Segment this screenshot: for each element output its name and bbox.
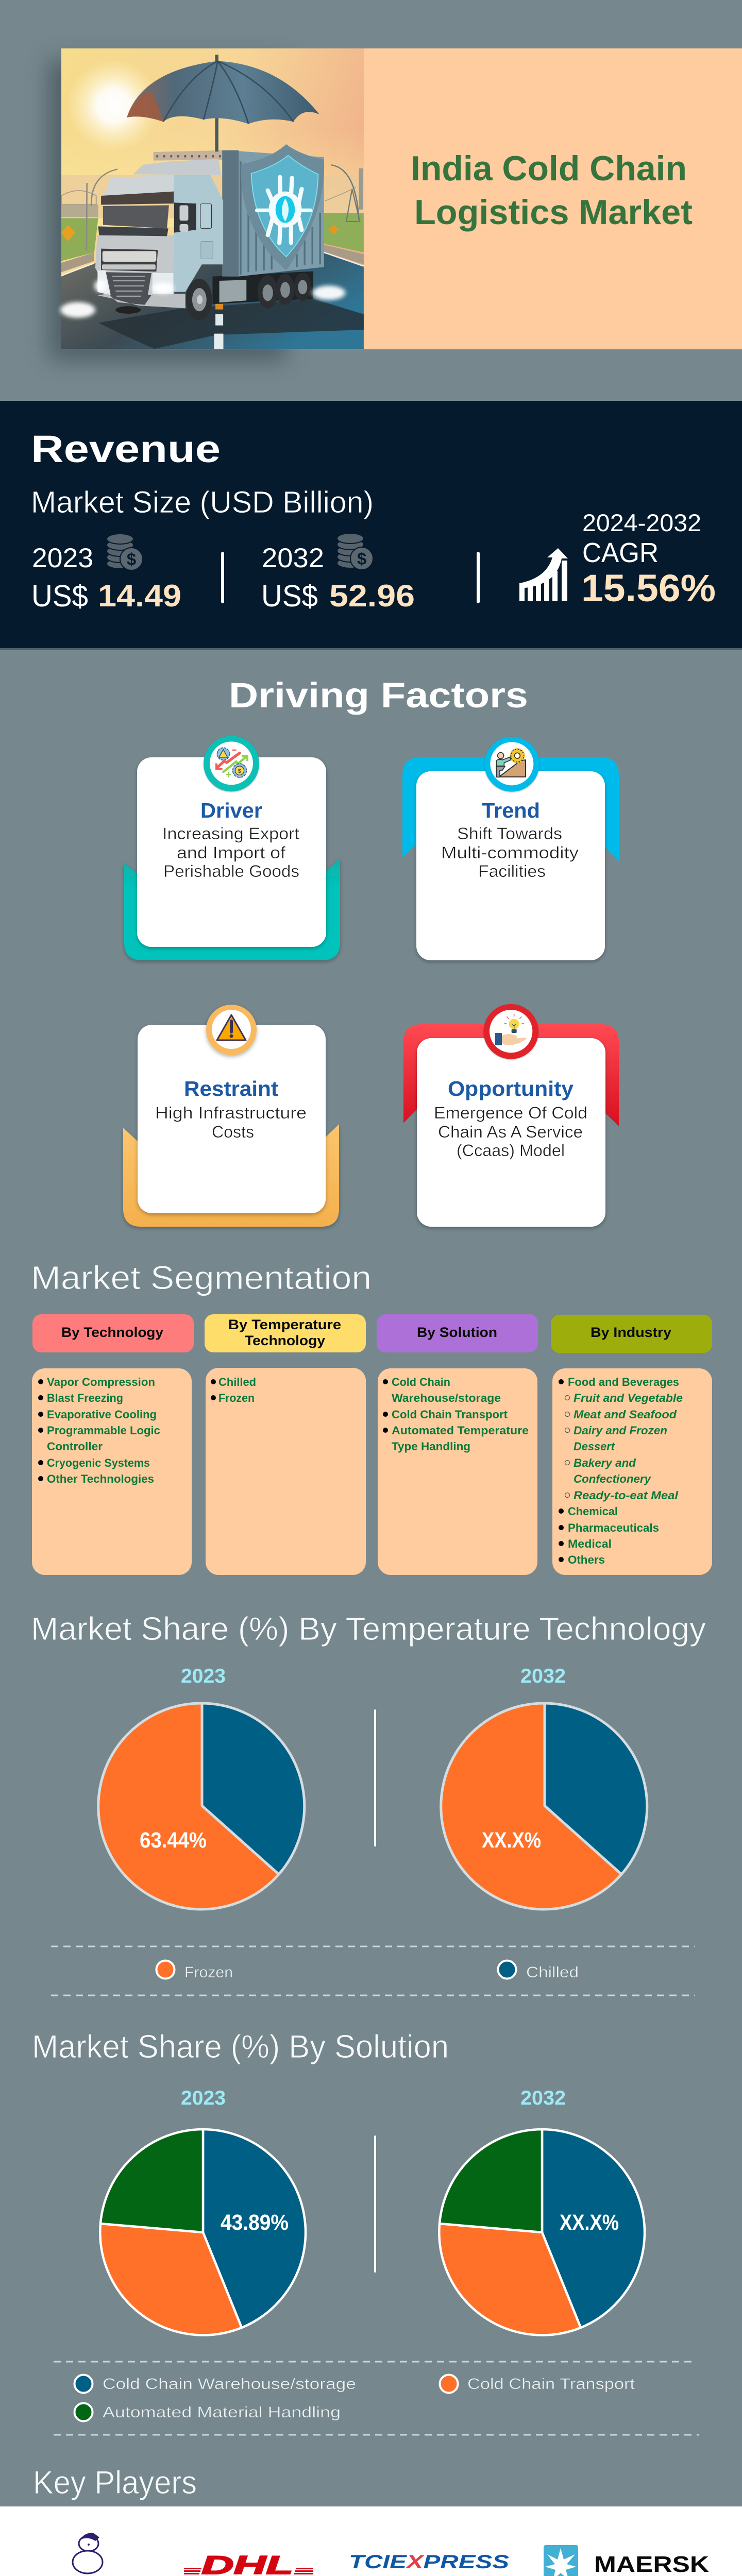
- pie chart: temperature technology 2023: [98, 1703, 305, 1909]
- panel: by industry: Confectionery: [574, 1472, 652, 1485]
- divider: [477, 552, 480, 603]
- text: driver description: and Import of: [177, 843, 285, 862]
- heading: Trend: [482, 799, 540, 822]
- logo: TCI Express: TCIE XPRESS: [349, 2551, 509, 2572]
- icon: coins 2032: $: [357, 549, 366, 568]
- panel: by temperature technology: Chilled: [218, 1376, 256, 1388]
- panel: trend: [402, 737, 619, 960]
- label: 2032: 2032: [520, 1665, 566, 1687]
- logo: DHL: [184, 2551, 313, 2576]
- panel: by solution: Warehouse/storage: [392, 1392, 501, 1404]
- icon: hand with lightbulb: [483, 1004, 538, 1059]
- logo: snowman: [34, 2533, 151, 2576]
- text: opportunity description: Emergence Of Cold: [434, 1104, 587, 1122]
- panel: by industry: Chemical: [568, 1505, 618, 1518]
- heading: key players: Key Players: [33, 2465, 197, 2501]
- heading: market share by temperature technology: Market Share (%) By Temperature Technology: [31, 1611, 706, 1647]
- pie chart: temperature technology 2032: [441, 1703, 647, 1909]
- panel: by industry: Pharmaceuticals: [568, 1521, 659, 1534]
- panel: opportunity: [403, 1004, 619, 1227]
- divider: [221, 552, 224, 603]
- legend: temperature technology: [157, 1961, 579, 1981]
- panel: by industry: Fruit and Vegetable: [574, 1392, 683, 1404]
- legend: solution: Cold Chain Transport: [467, 2376, 635, 2393]
- panel: by technology: Other Technologies: [47, 1472, 154, 1485]
- text: opportunity description: (Ccaas) Model: [457, 1141, 565, 1160]
- panel: by temperature technology: Technology: [245, 1333, 325, 1348]
- value: 63.44%: 63.44%: [140, 1828, 207, 1853]
- value: XX.X%: XX.X%: [560, 2210, 619, 2235]
- panel: by industry: Bakery and: [574, 1456, 636, 1469]
- stat: 2032: [261, 543, 415, 613]
- title panel: Logistics Market: [414, 193, 693, 232]
- stat: 2032: 52.96: [329, 579, 415, 613]
- panel: by technology: Cryogenic Systems: [47, 1456, 150, 1469]
- panel: by temperature technology: By Temperature: [228, 1317, 341, 1332]
- panel: by industry: Others: [568, 1553, 605, 1566]
- panel: by solution: Cold Chain Transport: [392, 1408, 508, 1421]
- panel: by industry: [551, 1315, 712, 1575]
- divider: [374, 2136, 376, 2273]
- icon: person pushing gear uphill: [484, 737, 539, 792]
- panel: by solution: Automated Temperature: [392, 1424, 529, 1437]
- pie chart: solution 2032: [439, 2129, 645, 2335]
- label: 2023: 2023: [181, 1665, 226, 1687]
- label: 2023: 2023: [181, 2087, 226, 2109]
- text: restraint description: Costs: [212, 1123, 254, 1141]
- panel: by industry: Medical: [568, 1537, 612, 1550]
- hero banner: [49, 48, 742, 361]
- panel: driver: [124, 736, 340, 960]
- panel: by solution: Type Handling: [392, 1440, 470, 1453]
- text: opportunity description: [434, 1104, 587, 1160]
- stat: 2023: [31, 543, 181, 613]
- pie chart: solution 2023: [100, 2129, 306, 2335]
- title panel: [364, 48, 742, 349]
- value: XX.X%: XX.X%: [482, 1828, 541, 1853]
- panel: by technology: [32, 1314, 194, 1575]
- text: driver description: Increasing Export: [162, 824, 299, 843]
- illustration: truck under umbrella: [60, 48, 364, 349]
- text: driver description: [162, 824, 299, 880]
- divider: [374, 1709, 376, 1846]
- legend: solution: Cold Chain Warehouse/storage: [103, 2376, 356, 2393]
- text: trend description: Multi-commodity: [441, 843, 579, 862]
- icon: warning triangle: [206, 1005, 257, 1055]
- panel: key players logos: [0, 2506, 742, 2576]
- panel: by technology: Evaporative Cooling: [47, 1408, 157, 1421]
- heading: Driver: [200, 799, 262, 822]
- heading: market segmentation: Market Segmentation: [31, 1259, 372, 1296]
- logo: Maersk: [544, 2545, 709, 2576]
- heading: Opportunity: [448, 1077, 574, 1100]
- heading: market share by solution: Market Share (%) By Solution: [32, 2029, 449, 2065]
- text: trend description: Shift Towards: [457, 824, 562, 843]
- title panel: India Cold Chain: [411, 149, 687, 188]
- stat: 2023: 14.49: [98, 579, 181, 613]
- panel: revenue: [0, 401, 742, 650]
- text: driver description: Perishable Goods: [163, 862, 299, 880]
- heading: Restraint: [184, 1077, 278, 1100]
- panel: by technology: Programmable Logic: [47, 1424, 160, 1437]
- text: restraint description: High Infrastructure: [155, 1104, 307, 1122]
- heading: driving factors: Driving Factors: [229, 675, 528, 715]
- value: 43.89%: 43.89%: [221, 2210, 289, 2235]
- stat: CAGR: [581, 509, 716, 609]
- heading: revenue: Revenue: [31, 428, 221, 470]
- stat: CAGR: CAGR: [582, 537, 659, 568]
- icon: gears and arrows: $: [238, 768, 242, 774]
- panel: by temperature technology: Frozen: [218, 1392, 255, 1404]
- icon: growth chart arrow: [519, 548, 568, 601]
- panel: by industry: By Industry: [591, 1325, 671, 1340]
- stat: CAGR: 15.56%: [581, 567, 716, 609]
- legend: temperature technology: Frozen: [184, 1964, 233, 1981]
- stat: 2023: US$: [31, 579, 88, 613]
- panel: by solution: By Solution: [417, 1325, 497, 1340]
- panel: by industry: Dairy and Frozen: [574, 1424, 667, 1437]
- panel: by technology: Vapor Compression: [47, 1376, 155, 1388]
- panel: by industry: Dessert: [574, 1440, 616, 1453]
- icon: coins 2032: [337, 533, 373, 570]
- legend: solution: Automated Material Handling: [103, 2404, 341, 2421]
- text: opportunity description: Chain As A Service: [438, 1123, 583, 1141]
- legend: solution: [74, 2375, 635, 2421]
- label: 2032: 2032: [520, 2087, 566, 2109]
- panel: by industry: Ready-to-eat Meal: [574, 1489, 679, 1502]
- panel: restraint: [123, 1005, 339, 1227]
- panel: by solution: Cold Chain: [392, 1376, 450, 1388]
- legend: temperature technology: Chilled: [526, 1964, 579, 1981]
- stat: 2023: 2023: [32, 543, 93, 573]
- panel: by temperature technology: [205, 1314, 366, 1575]
- stat: 2032: US$: [261, 579, 318, 613]
- panel: by technology: Blast Freezing: [47, 1392, 123, 1404]
- subheading: market size: Market Size (USD Billion): [31, 485, 374, 519]
- panel: by industry: Food and Beverages: [568, 1376, 679, 1388]
- stat: CAGR: 2024-2032: [582, 509, 701, 536]
- icon: coins 2023: [107, 534, 143, 570]
- text: trend description: [441, 824, 579, 880]
- text: restraint description: [155, 1104, 307, 1141]
- icon: gears and arrows: [204, 736, 259, 791]
- panel: by technology: Controller: [47, 1440, 103, 1453]
- panel: by technology: By Technology: [61, 1325, 163, 1340]
- text: trend description: Facilities: [478, 862, 546, 880]
- panel: by solution: [377, 1314, 538, 1575]
- panel: by industry: Meat and Seafood: [574, 1408, 677, 1421]
- stat: 2032: 2032: [262, 543, 324, 573]
- icon: coins 2023: $: [127, 550, 136, 569]
